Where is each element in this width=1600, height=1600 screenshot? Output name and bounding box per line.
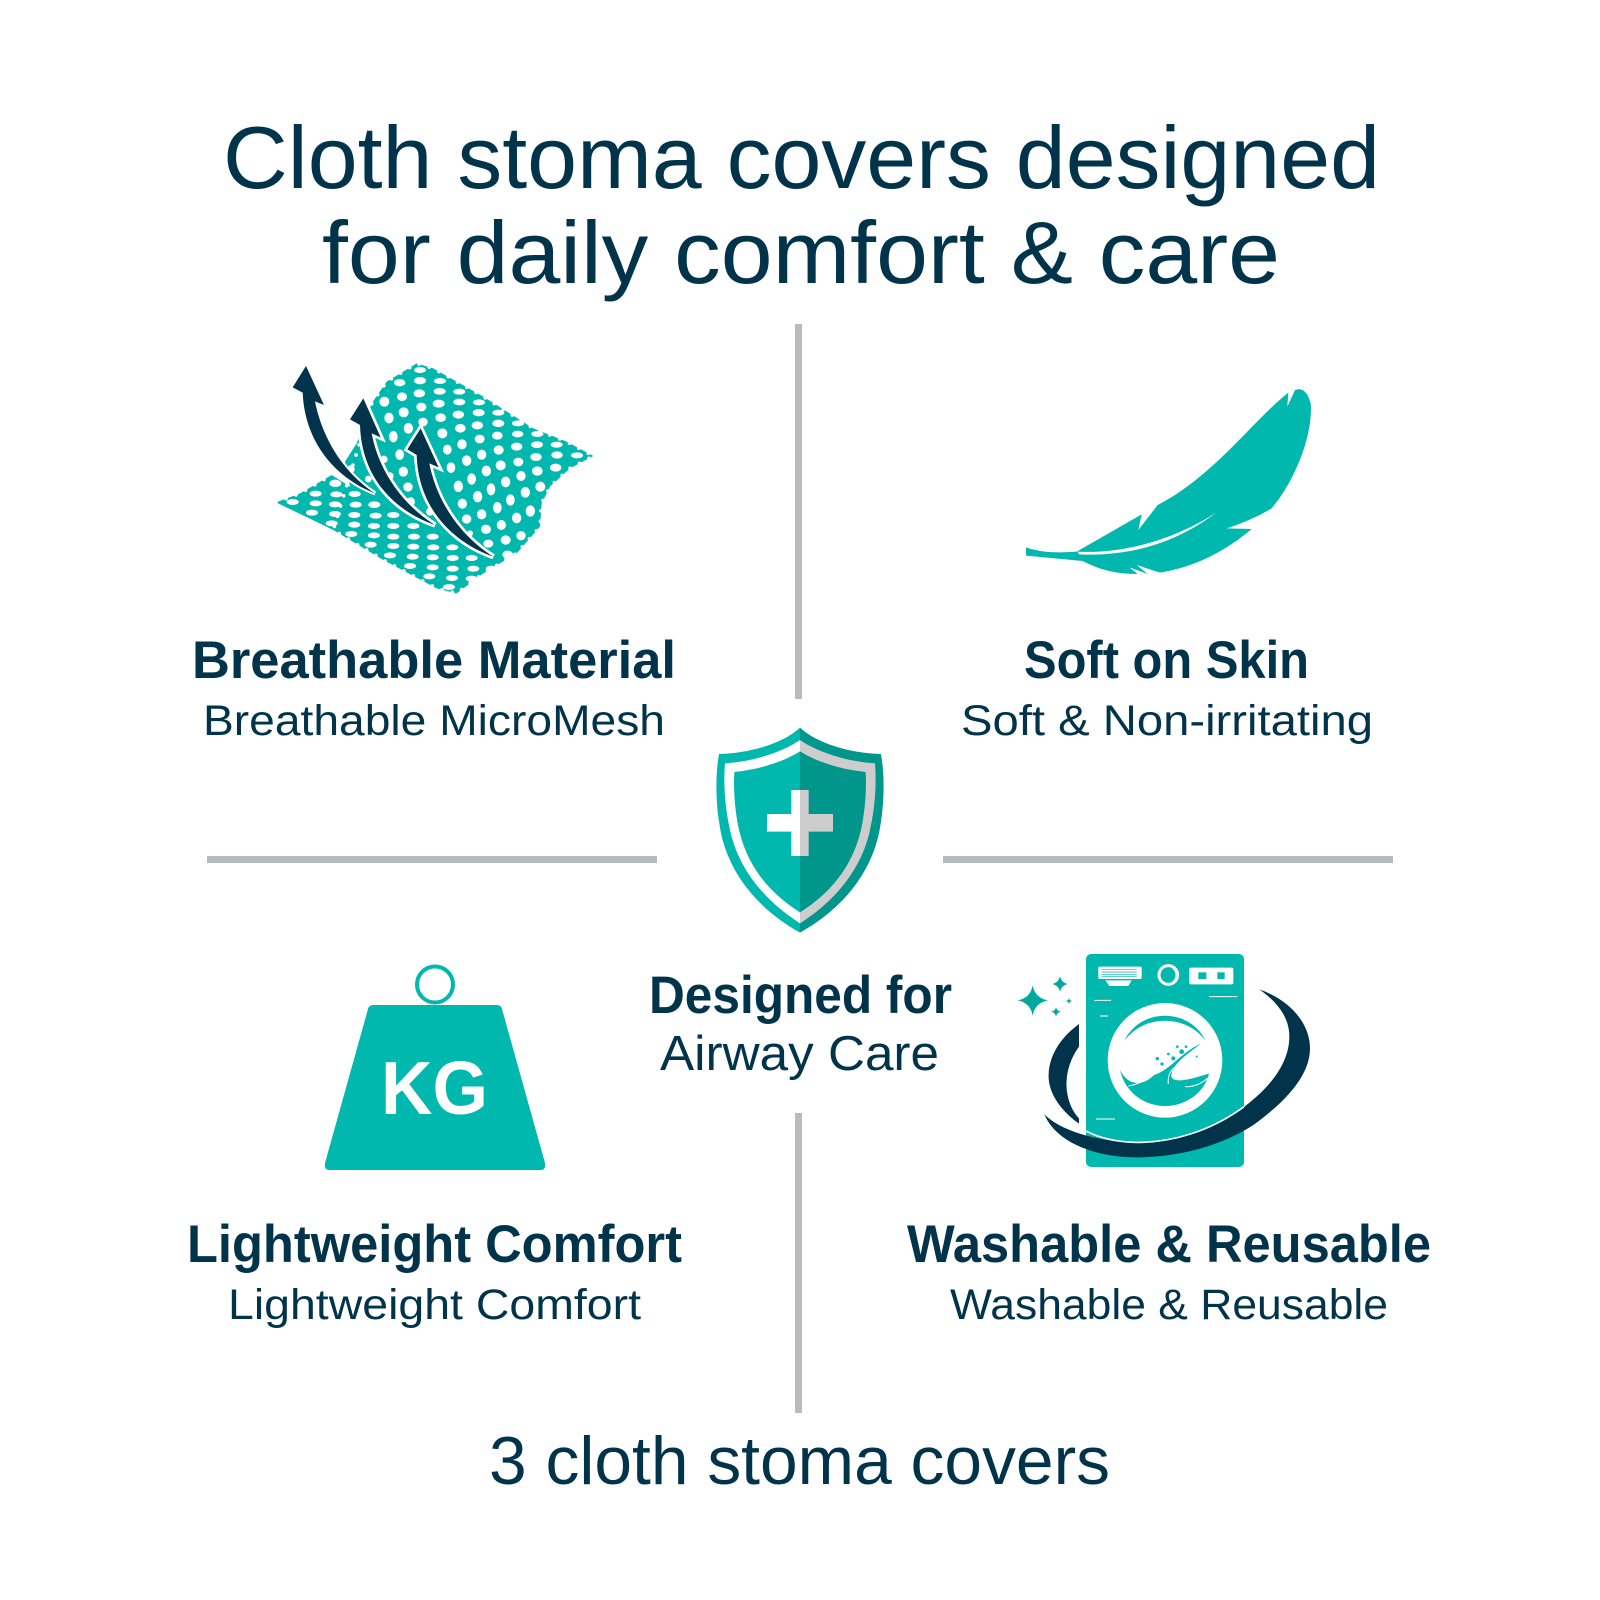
title (223, 108, 1380, 302)
arrow 3 (407, 428, 493, 557)
icon: breathable mesh with arrows (276, 363, 593, 593)
title line 2: for daily comfort & care (322, 203, 1280, 302)
heading: washable and reusable (907, 1215, 1431, 1329)
swoosh (1044, 989, 1310, 1157)
icon: kg weight (325, 966, 545, 1170)
heading: breathable material (192, 631, 676, 745)
title line 1: Cloth stoma covers designed (223, 108, 1380, 207)
center label: designed for airway care (649, 966, 952, 1081)
heading: lightweight comfort (187, 1215, 682, 1329)
heading: washable and reusable: Washable & Reusable (907, 1215, 1431, 1274)
detergent drawer (1098, 967, 1142, 986)
subheading: breathable micromesh: Breathable MicroMesh (203, 697, 665, 745)
icon: shield with cross (716, 728, 884, 933)
arrow 2 (350, 398, 435, 525)
heading: lightweight comfort: Lightweight Comfort (187, 1215, 682, 1274)
center label: designed for airway care: Designed for (649, 966, 952, 1025)
subheading: washable and reusable: Washable & Reusable (950, 1281, 1388, 1329)
subheading: lightweight comfort: Lightweight Comfort (228, 1281, 641, 1329)
center sublabel: Airway Care (660, 1027, 939, 1081)
heading: breathable material: Breathable Material (192, 631, 676, 690)
heading: soft on skin: Soft on Skin (1024, 631, 1309, 690)
footer: 3 cloth stoma covers: 3 cloth stoma covers (489, 1423, 1110, 1499)
icon: feather (1026, 389, 1311, 574)
kg label: KG (381, 1046, 488, 1130)
arrow 1 (293, 366, 375, 493)
heading: soft on skin (961, 631, 1373, 745)
subheading: soft and non-irritating: Soft & Non-irritating (961, 697, 1373, 745)
sparkles (1018, 976, 1072, 1017)
icon: washing machine (1018, 954, 1310, 1167)
